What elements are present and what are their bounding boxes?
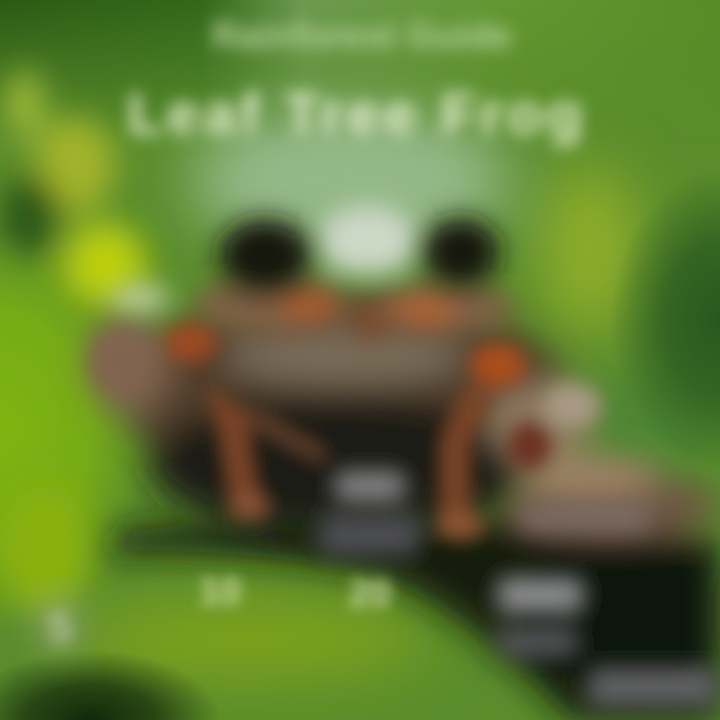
yellow leaves at left edge (0, 70, 147, 654)
bottom captions: 20 (349, 573, 391, 615)
bottom captions (48, 571, 391, 652)
title: Rainforest Guide (212, 15, 512, 56)
frog head (110, 206, 515, 342)
orange markings and legs (90, 322, 600, 539)
bottom captions: 10 (199, 571, 241, 613)
frog body (88, 295, 660, 535)
frog scene (88, 206, 720, 720)
title: Leaf Tree Frog (128, 82, 582, 147)
branch (110, 473, 720, 720)
grey blurred stat blocks (320, 472, 718, 706)
bottom captions: 5 (48, 603, 72, 652)
frog eyes (219, 218, 499, 291)
title (128, 15, 582, 147)
